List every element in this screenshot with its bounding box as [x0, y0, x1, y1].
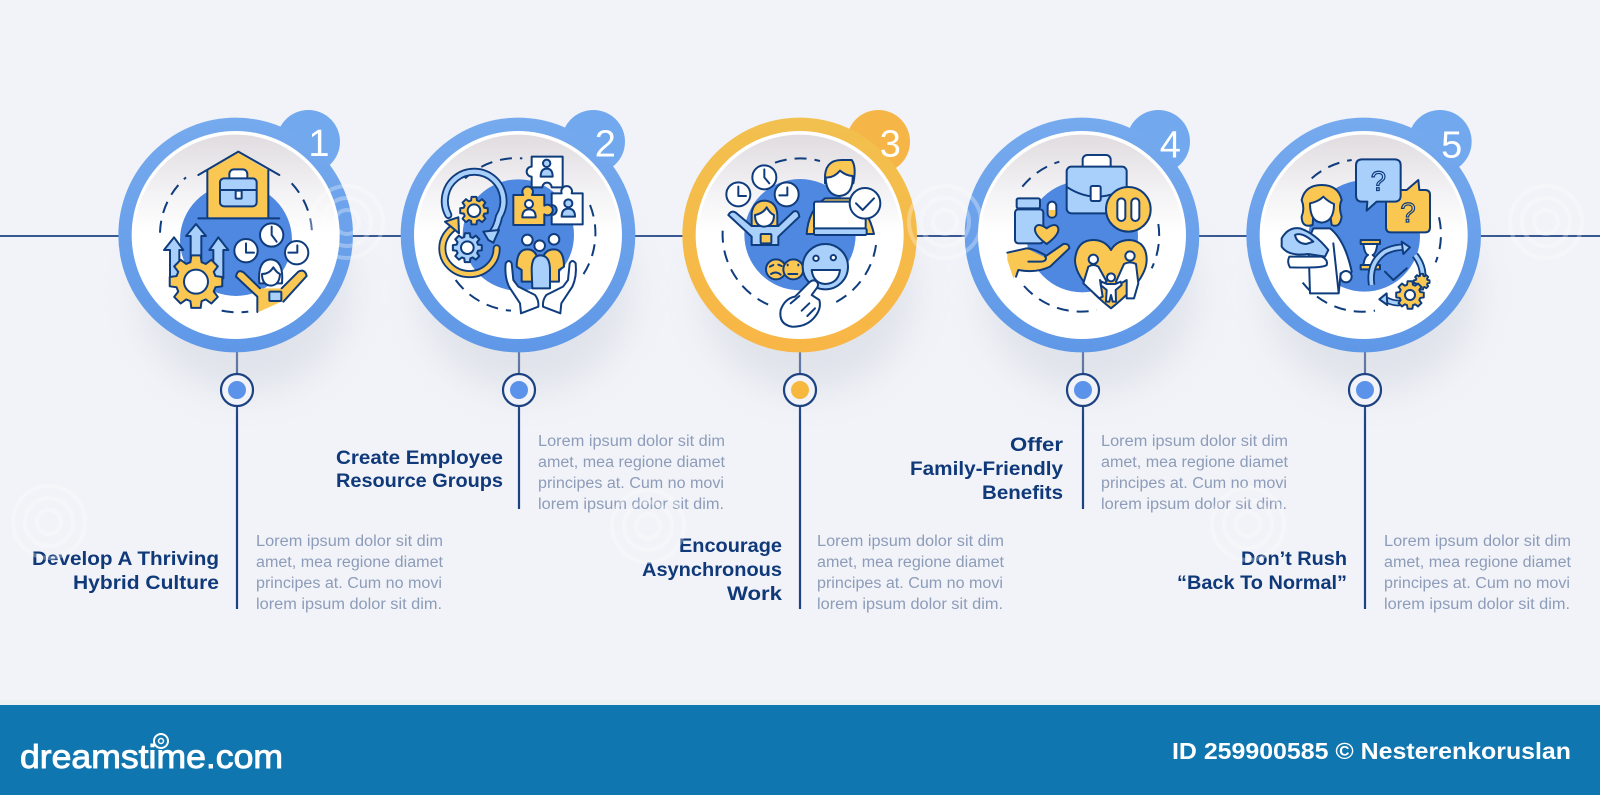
icon: asynchronous work [723, 158, 880, 327]
step 2 text: Create Employee [336, 447, 503, 469]
step 3 text: principes at. Cum no movi [817, 575, 1003, 592]
footer image id: ID 259900585 © Nesterenkoruslan [1172, 738, 1571, 764]
step 1 emblem [118, 110, 353, 352]
step 1 text: amet, mea regione diamet [256, 554, 444, 571]
step 3 text: Asynchronous [642, 559, 782, 581]
step 3 text: lorem ipsum dolor sit dim. [817, 596, 1003, 613]
step 4 text: lorem ipsum dolor sit dim. [1101, 496, 1287, 513]
step 3 emblem [682, 110, 917, 352]
footer logo: dreamstime.com [20, 738, 283, 775]
step 3 text: amet, mea regione diamet [817, 554, 1005, 571]
step 5 text: “Back To Normal” [1177, 572, 1347, 594]
step 3 text: Lorem ipsum dolor sit dim [817, 533, 1004, 550]
step 1 text: principes at. Cum no movi [256, 575, 442, 592]
step 1 text: Develop A Thriving [32, 548, 219, 570]
number 3: 3 [880, 124, 901, 166]
step 3 text: Encourage [679, 535, 782, 557]
step 1 text: lorem ipsum dolor sit dim. [256, 596, 442, 613]
step 5 text: Lorem ipsum dolor sit dim [1384, 533, 1571, 550]
step 5 text: Don’t Rush [1241, 548, 1347, 570]
step 2 text: Resource Groups [336, 470, 503, 492]
step 5 emblem [1246, 110, 1481, 352]
icon: don't rush back to normal: ? [1371, 166, 1386, 197]
step 4 text: Offer [1010, 434, 1063, 456]
icon: don't rush back to normal [1282, 159, 1441, 312]
number 4: 4 [1160, 124, 1181, 166]
number 5: 5 [1441, 124, 1462, 166]
step 4 text: Family-Friendly [910, 458, 1063, 480]
step 2 text: Lorem ipsum dolor sit dim [538, 433, 725, 450]
horizontal timeline [0, 235, 1600, 237]
step 5 text: lorem ipsum dolor sit dim. [1384, 596, 1570, 613]
step 4 text [910, 433, 1289, 513]
step 3 text: Work [727, 583, 782, 605]
step 2 text: lorem ipsum dolor sit dim. [538, 496, 724, 513]
step 4 text: amet, mea regione diamet [1101, 454, 1289, 471]
step 2 emblem [401, 110, 635, 352]
step 5 text: principes at. Cum no movi [1384, 575, 1570, 592]
step 5 text: amet, mea regione diamet [1384, 554, 1572, 571]
watermarks [13, 186, 1582, 562]
icon: don't rush back to normal: ? [1400, 197, 1416, 228]
number 1: 1 [308, 123, 330, 165]
step 5 text [1177, 533, 1572, 613]
step 2 text: principes at. Cum no movi [538, 475, 724, 492]
step 1 text: Hybrid Culture [73, 572, 219, 594]
step 2 text [336, 433, 726, 513]
step 2 text: amet, mea regione diamet [538, 454, 726, 471]
vertical connectors [237, 340, 1365, 609]
icon: family-friendly benefits [1007, 155, 1159, 312]
number 2: 2 [595, 124, 616, 166]
step 1 text: Lorem ipsum dolor sit dim [256, 533, 443, 550]
timeline nodes [221, 374, 1381, 406]
step 1 text [32, 533, 444, 613]
step 4 emblem [965, 110, 1199, 352]
step 4 text: principes at. Cum no movi [1101, 475, 1287, 492]
icon: employee resource groups [442, 157, 595, 313]
circle shadows [140, 192, 1477, 392]
step 4 text: Lorem ipsum dolor sit dim [1101, 433, 1288, 450]
footer bar [0, 700, 1600, 795]
step 3 text [642, 533, 1005, 613]
icon: hybrid culture [160, 152, 312, 312]
step 4 text: Benefits [982, 482, 1063, 504]
